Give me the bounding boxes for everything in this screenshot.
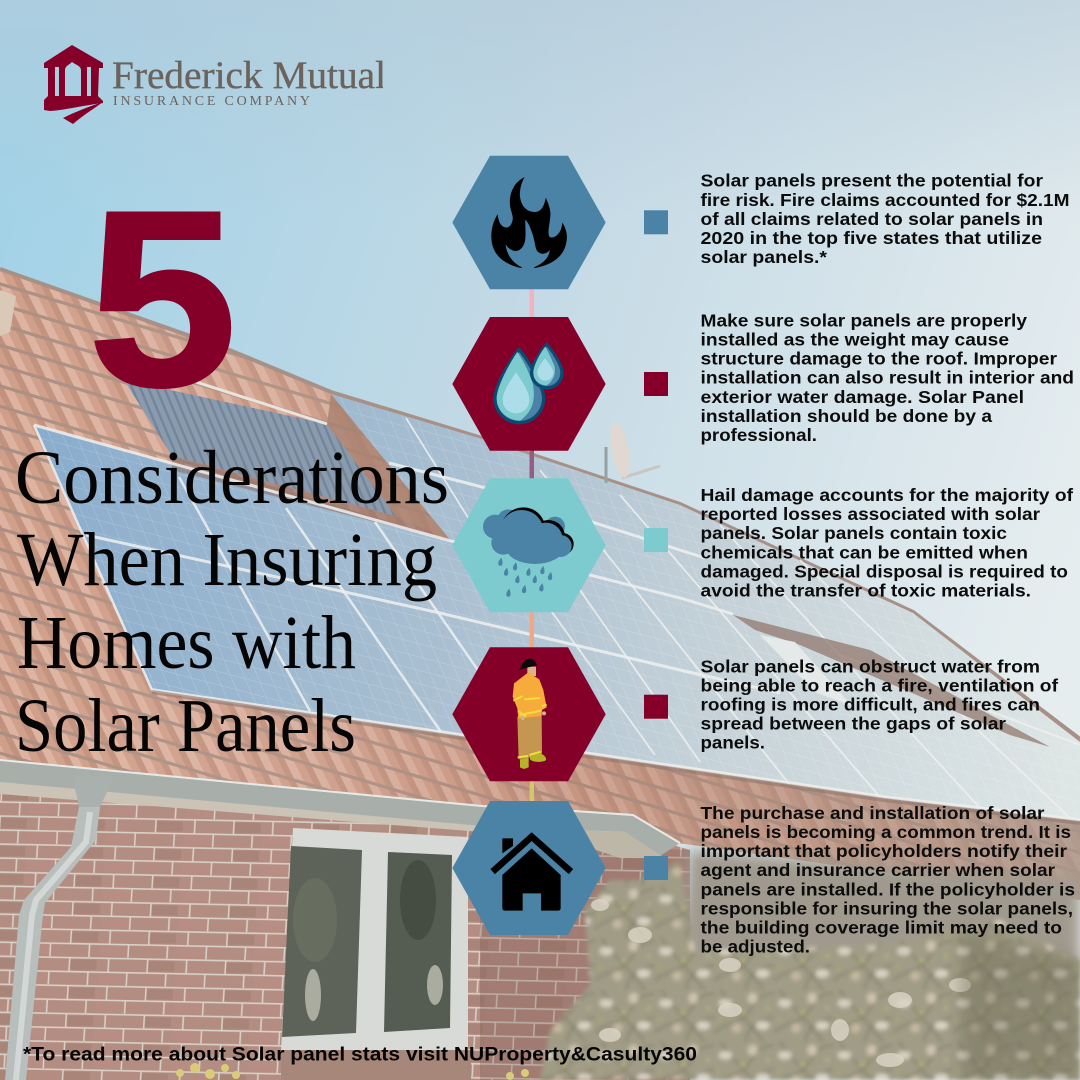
square marker 5 xyxy=(644,856,668,880)
text block 3: chemicals that can be emitted when xyxy=(700,542,1028,562)
text block 4: panels. xyxy=(700,732,765,752)
text block 1: solar panels.* xyxy=(700,247,827,267)
text block 1: Solar panels present the potential for xyxy=(700,171,1043,191)
text block 1 xyxy=(700,171,1070,267)
text block 1: of all claims related to solar panels in xyxy=(700,209,1043,229)
text block 1: 2020 in the top five states that utilize xyxy=(700,228,1042,248)
text block 3: damaged. Special disposal is required to xyxy=(700,561,1068,581)
text block 5: important that policyholders notify their xyxy=(700,841,1067,861)
icon: flame xyxy=(492,178,566,268)
text block 3: reported losses associated with solar xyxy=(700,504,1040,524)
gutter and fascia xyxy=(0,760,680,858)
brick wall xyxy=(0,790,690,1080)
solar panels xyxy=(34,380,1080,823)
roof tiles xyxy=(0,269,1080,900)
hexagon 5: home xyxy=(452,801,606,935)
text block 4: being able to reach a fire, ventilation of xyxy=(700,675,1058,695)
big number 5: 5 xyxy=(88,159,237,438)
text block 5: the building coverage limit may need to xyxy=(700,917,1062,937)
text block 5: panels is becoming a common trend. It is xyxy=(700,822,1071,842)
hexagon 1: fire xyxy=(452,156,606,289)
hexagon 2: water drops xyxy=(452,317,606,451)
square marker 1 xyxy=(644,210,668,234)
text block 2 xyxy=(700,310,1074,445)
icon: storm cloud with rain xyxy=(483,507,574,597)
text block 2: Make sure solar panels are properly xyxy=(700,310,1027,330)
text block 5: agent and insurance carrier when solar xyxy=(700,860,1055,880)
connector lines between hexagons xyxy=(530,289,534,802)
title xyxy=(15,436,449,768)
text block 2: installation can also result in interior and xyxy=(700,368,1074,388)
icon: water drops xyxy=(493,342,564,424)
skylight box xyxy=(733,615,1050,747)
text block 4: roofing is more difficult, and fires can xyxy=(700,694,1040,714)
text block 5: The purchase and installation of solar xyxy=(700,803,1045,823)
text block 2: structure damage to the roof. Improper xyxy=(700,349,1057,369)
text block 2: professional. xyxy=(700,425,817,445)
window xyxy=(281,828,471,1080)
text block 5 xyxy=(700,803,1075,956)
text block 5: be adjusted. xyxy=(700,936,810,956)
logo wordmark: Frederick Mutual xyxy=(112,54,386,97)
text block 1: fire risk. Fire claims accounted for $2.1M xyxy=(700,190,1070,210)
title: Considerations xyxy=(15,436,449,520)
text block 5: panels are installed. If the policyholder is xyxy=(700,879,1075,899)
square marker 4 xyxy=(644,695,668,719)
logo: Frederick Mutual Insurance Company xyxy=(44,45,386,124)
text block 2: installed as the weight may cause xyxy=(700,330,1009,350)
downspout xyxy=(5,775,114,1080)
icon: bank building logo xyxy=(44,45,103,124)
text block 2: exterior water damage. Solar Panel xyxy=(700,387,1024,407)
title: When Insuring xyxy=(17,518,437,602)
text block 3 xyxy=(700,485,1073,600)
text block 3: Hail damage accounts for the majority of xyxy=(700,485,1073,505)
title: Solar Panels xyxy=(15,684,356,768)
text block 2: installation should be done by a xyxy=(700,406,992,426)
satellite dish xyxy=(606,421,660,483)
icon: house xyxy=(493,837,571,911)
hexagon 3: hail storm cloud xyxy=(452,478,606,612)
square marker 2 xyxy=(644,372,668,396)
title: Homes with xyxy=(17,601,356,685)
hexagon 4: firefighter xyxy=(452,647,606,781)
text block 4 xyxy=(700,656,1058,752)
yellow flowers xyxy=(176,1063,529,1080)
text block 3: avoid the transfer of toxic materials. xyxy=(700,580,1031,600)
flowering bush xyxy=(540,850,1080,1080)
icon: firefighter xyxy=(513,659,547,769)
footnote: *To read more about Solar panel stats visit NUProperty&Casulty360 xyxy=(23,1045,697,1066)
text block 5: responsible for insuring the solar panels, xyxy=(700,898,1073,918)
text block 3: panels. Solar panels contain toxic xyxy=(700,523,1007,543)
text block 4: spread between the gaps of solar xyxy=(700,713,1006,733)
square marker 3 xyxy=(644,528,668,552)
text block 4: Solar panels can obstruct water from xyxy=(700,656,1040,676)
logo wordmark: INSURANCE COMPANY xyxy=(113,94,310,109)
